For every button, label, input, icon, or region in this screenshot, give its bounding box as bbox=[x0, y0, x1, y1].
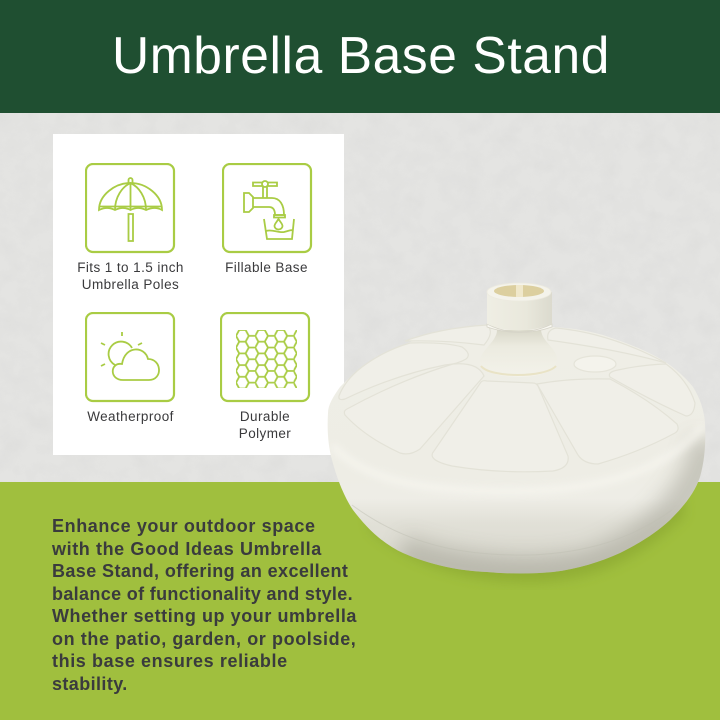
background texture bbox=[0, 113, 720, 482]
green lower panel bbox=[0, 482, 720, 720]
description text: stability. bbox=[52, 674, 128, 694]
ground shadow bbox=[370, 480, 685, 582]
label: Umbrella Poles bbox=[82, 276, 179, 292]
description text: balance of functionality and style. bbox=[52, 584, 353, 604]
lid panels bbox=[339, 325, 695, 472]
product photo: umbrella base bbox=[328, 283, 706, 582]
rim highlight bbox=[672, 430, 702, 455]
description text: Whether setting up your umbrella bbox=[52, 606, 357, 626]
label: Durable bbox=[240, 409, 290, 424]
panel: lower right bbox=[537, 379, 678, 464]
collar flange bbox=[487, 324, 552, 332]
title: Umbrella Base Stand bbox=[112, 26, 610, 84]
description text: on the patio, garden, or poolside, bbox=[52, 628, 356, 648]
label bbox=[77, 260, 184, 292]
side shading bbox=[400, 440, 708, 573]
feature: weatherproof bbox=[85, 312, 176, 424]
panel: upper right bbox=[609, 364, 695, 416]
lower seam bbox=[352, 504, 414, 538]
icon: sun and cloud bbox=[85, 312, 176, 402]
feature: umbrella poles bbox=[77, 163, 184, 292]
label: Polymer bbox=[239, 426, 291, 440]
panel: lower left bbox=[344, 364, 484, 454]
description text: Enhance your outdoor space bbox=[52, 516, 316, 536]
label: Weatherproof bbox=[87, 409, 174, 424]
icon: honeycomb bbox=[220, 312, 310, 402]
description text: with the Good Ideas Umbrella bbox=[52, 538, 322, 558]
panel: upper left bbox=[339, 343, 468, 400]
panel: features bbox=[53, 134, 344, 455]
panel: front bbox=[432, 381, 568, 472]
panel: back right bbox=[548, 328, 666, 363]
collar bbox=[487, 292, 552, 330]
feature: fillable base bbox=[222, 163, 312, 275]
neck bbox=[480, 330, 557, 377]
icon: umbrella bbox=[85, 163, 176, 254]
description text: Base Stand, offering an excellent bbox=[52, 561, 348, 581]
icon: water tap bbox=[222, 163, 312, 254]
title banner bbox=[0, 0, 720, 113]
description text: this base ensures reliable bbox=[52, 651, 288, 671]
description text bbox=[52, 516, 357, 694]
label: Fillable Base bbox=[225, 260, 308, 275]
feature: durable polymer bbox=[220, 312, 310, 441]
fill plug bbox=[574, 356, 616, 372]
label bbox=[239, 409, 291, 441]
panel: back left bbox=[405, 325, 490, 345]
label: Fits 1 to 1.5 inch bbox=[77, 260, 184, 275]
base body bbox=[328, 283, 708, 574]
